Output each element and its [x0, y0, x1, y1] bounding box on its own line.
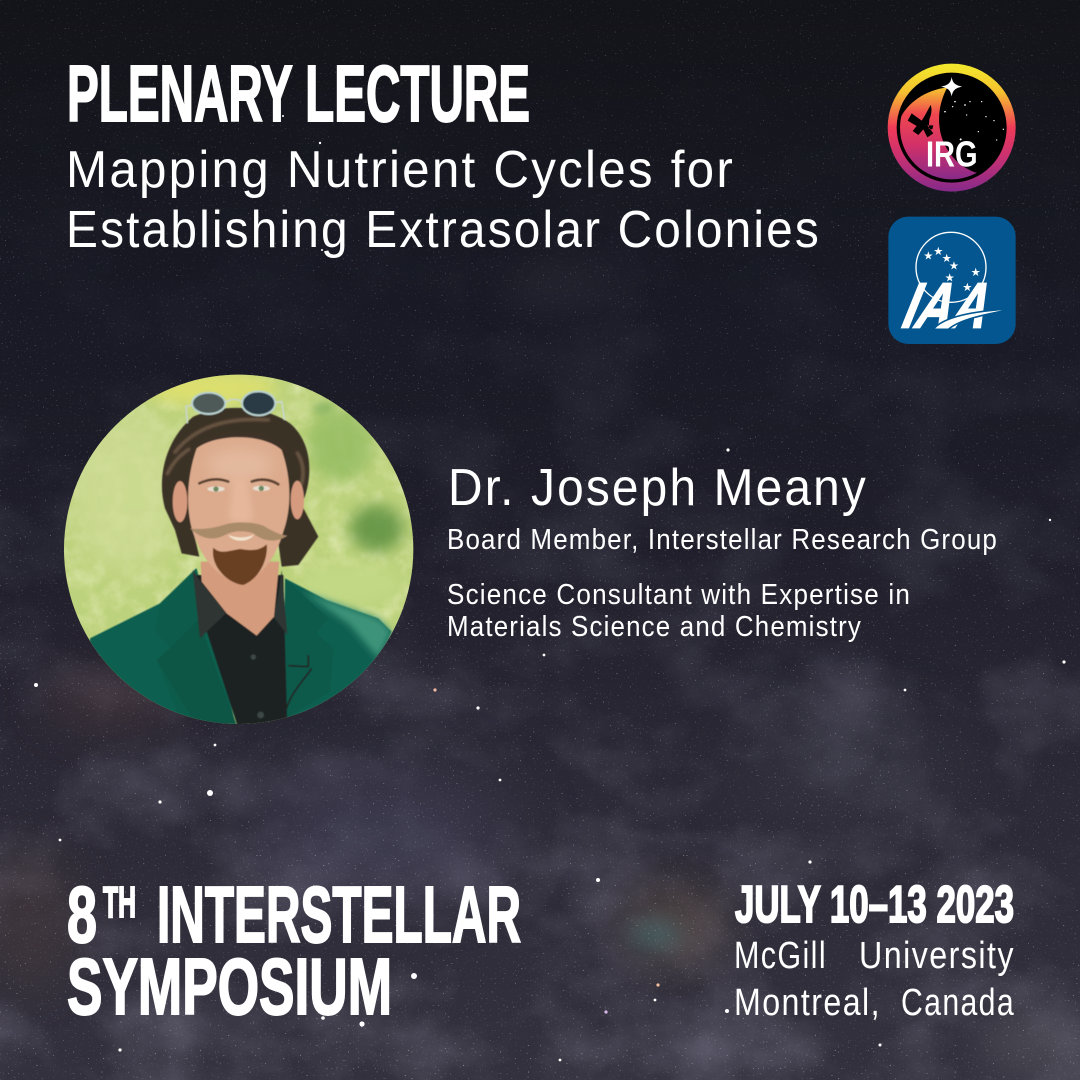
event location: Canada [901, 982, 1015, 1024]
stars of the constellation: ★ [945, 271, 955, 285]
event location: McGill [734, 935, 827, 977]
event name [67, 870, 521, 1031]
speaker role: Board Member, Interstellar Research Group [447, 524, 998, 556]
speaker bio: Science Consultant with Expertise in [447, 579, 911, 611]
label: IAA: IAA [893, 271, 1005, 342]
mouth [228, 534, 254, 541]
stars of the constellation: ★ [962, 280, 972, 294]
person [90, 391, 392, 732]
ears [173, 481, 187, 522]
event location: University [859, 935, 1015, 977]
icon: silhouette rocket ship [908, 105, 933, 137]
icon: four point star [941, 77, 962, 97]
swoosh [933, 309, 1015, 329]
brows and eyes [199, 479, 278, 484]
event name: INTERSTELLAR [157, 870, 521, 959]
label: IRG: IRG [926, 134, 978, 175]
subtitle: lecture topic: Establishing Extrasolar Colonies [66, 201, 821, 259]
shirt [193, 575, 287, 728]
event location: Montreal, [734, 982, 881, 1024]
stars of the constellation [923, 244, 981, 294]
speaker bio [447, 579, 911, 643]
subtitle: lecture topic: Mapping Nutrient Cycles for [66, 141, 735, 199]
speaker name: Dr. Joseph Meany [448, 459, 868, 517]
speaker portrait photo [64, 374, 414, 724]
jacket [90, 568, 392, 732]
neck [201, 562, 279, 636]
logo: IRG round badge [888, 64, 1016, 192]
event name: TH [103, 878, 136, 927]
moustache [190, 522, 287, 541]
stars of the constellation: ★ [971, 265, 981, 279]
stars of the constellation: ★ [923, 249, 933, 263]
sunglasses on head [186, 391, 285, 423]
event name: 8 [67, 870, 97, 959]
stars of the constellation: ★ [933, 244, 943, 258]
goatee [213, 544, 267, 585]
event location [734, 935, 1015, 1024]
stars of the constellation: ★ [942, 251, 952, 265]
stars of the constellation: ★ [949, 258, 959, 272]
speaker bio: Materials Science and Chemistry [447, 611, 862, 643]
event name: SYMPOSIUM [67, 942, 392, 1031]
logo: IAA blue tile [888, 217, 1016, 344]
face [188, 437, 289, 582]
lapel microphone [286, 654, 312, 710]
shirt buttons [251, 654, 264, 718]
title: plenary lecture: PLENARY LECTURE [67, 49, 530, 138]
foliage background [64, 374, 414, 722]
subtitle: lecture topic [66, 141, 821, 259]
hair [162, 408, 318, 567]
